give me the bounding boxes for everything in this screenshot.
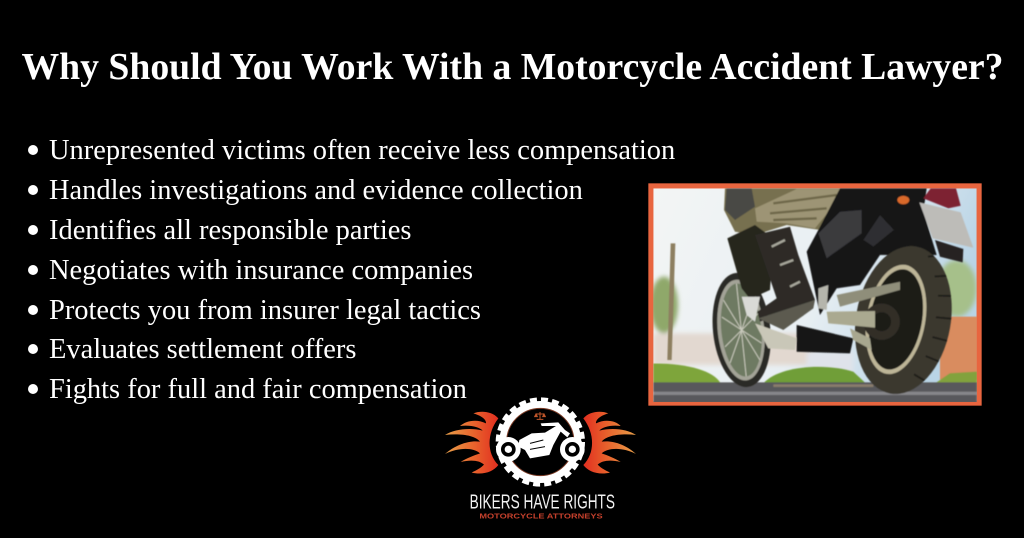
bullet: fair compensation: Fights for full and fair compensation bbox=[49, 374, 467, 405]
icon: right flames bbox=[583, 412, 636, 474]
logo: Bikers Have Rights bbox=[445, 401, 636, 520]
bullet: insurance negotiation: Negotiates with insurance companies bbox=[49, 255, 473, 286]
front wheel bbox=[712, 272, 771, 388]
dark lower trousers bbox=[727, 225, 773, 299]
logo name: BIKERS HAVE RIGHTS bbox=[470, 490, 615, 513]
icon: scales of justice bbox=[535, 412, 545, 419]
rear wheel bbox=[854, 246, 952, 395]
bullet: insurer tactics: Protects you from insurer legal tactics bbox=[49, 295, 481, 326]
icon: motorcycle bbox=[496, 422, 585, 462]
rider trousers bbox=[724, 188, 850, 235]
bike body bbox=[807, 188, 937, 315]
photo: rear of motorcycle with orange frame bbox=[648, 183, 982, 406]
bullet: settlement offers: Evaluates settlement offers bbox=[49, 334, 356, 365]
logo subtitle: MOTORCYCLE ATTORNEYS bbox=[479, 511, 603, 520]
bullet: less compensation: Unrepresented victims often receive less compensation bbox=[49, 135, 675, 166]
icon: left flames bbox=[445, 412, 498, 474]
bullet list of reasons bbox=[28, 135, 675, 405]
swingarm bbox=[827, 311, 875, 328]
photo frame bbox=[648, 183, 982, 406]
boot bbox=[755, 227, 815, 322]
engine guard bbox=[755, 323, 797, 350]
bullet: responsible parties: Identifies all responsible parties bbox=[49, 215, 411, 246]
tail light bbox=[923, 188, 961, 208]
plate bbox=[919, 202, 973, 248]
icon: gear ring bbox=[500, 401, 581, 483]
bullet: investigations: Handles investigations and evidence collection bbox=[49, 175, 583, 206]
title: Why Should You Work With a Motorcycle Accident Lawyer? bbox=[21, 46, 1004, 88]
